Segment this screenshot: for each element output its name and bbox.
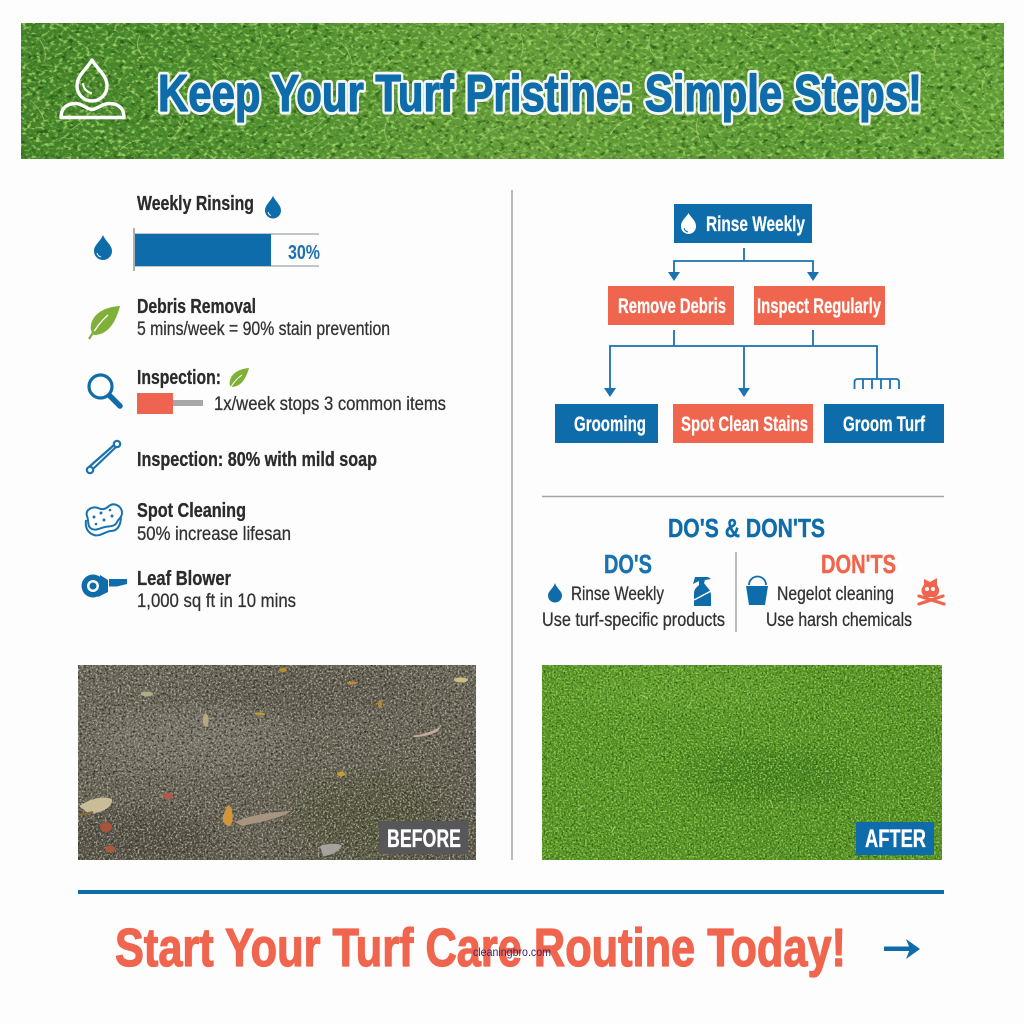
before photo xyxy=(78,665,476,860)
spot cleaning text xyxy=(137,500,291,545)
debris leaves xyxy=(79,668,468,856)
icon: magnifying glass xyxy=(89,375,120,406)
do's column: DO'S xyxy=(604,549,652,579)
box: inspect regularly: Inspect Regularly xyxy=(757,295,881,318)
don'ts column: DON'TS xyxy=(821,549,896,579)
icon: leaf blower xyxy=(82,574,127,598)
weekly rinsing item: Weekly Rinsing xyxy=(137,193,254,215)
box: inspect regularly xyxy=(754,286,885,325)
inspection item xyxy=(137,367,446,415)
box: spot clean stains xyxy=(673,404,813,443)
icon: water drop on surface xyxy=(61,60,124,118)
leaf blower text xyxy=(137,568,296,612)
before label xyxy=(379,821,468,854)
box: rinse weekly: Rinse Weekly xyxy=(706,213,805,236)
bar chart: 30 percent xyxy=(134,228,320,271)
do's column: Rinse Weekly xyxy=(571,583,664,605)
leaf blower text: 1,000 sq ft in 10 mins xyxy=(137,590,296,612)
call to action: Start Your Turf Care Routine Today! xyxy=(115,918,846,978)
header banner xyxy=(21,20,1004,159)
arrow xyxy=(884,939,920,959)
box: rinse weekly xyxy=(674,204,812,243)
inspection item: 1x/week stops 3 common items xyxy=(214,393,446,415)
do's column xyxy=(542,549,725,631)
don'ts column: Use harsh chemicals xyxy=(766,609,912,631)
box: groom turf: Groom Turf xyxy=(843,413,926,436)
do's and don'ts heading: DO'S & DON'TS xyxy=(668,513,825,543)
box: groom turf xyxy=(824,404,944,443)
after photo xyxy=(542,665,942,860)
bar chart: 30 percent: 30% xyxy=(288,242,320,264)
icon: leaf xyxy=(89,306,120,339)
don'ts column: Negelot cleaning xyxy=(777,583,894,605)
panel: turf care stats xyxy=(82,193,446,612)
spot cleaning text: 50% increase lifesan xyxy=(137,523,291,545)
box: grooming xyxy=(555,404,658,443)
inspection item: Inspection: xyxy=(137,367,221,389)
mild soap text: Inspection: 80% with mild soap xyxy=(137,449,377,471)
banner grass photo xyxy=(21,20,1004,159)
icon: wrench tool xyxy=(87,441,120,473)
after label: AFTER xyxy=(865,825,926,853)
box: remove debris: Remove Debris xyxy=(618,295,726,318)
panel: do's and don'ts xyxy=(542,513,944,632)
debris removal text: 5 mins/week = 90% stain prevention xyxy=(137,318,390,340)
box: grooming: Grooming xyxy=(574,413,646,436)
debris removal text xyxy=(137,296,390,340)
watermark: cleaningbro.com xyxy=(473,945,551,959)
spot cleaning text: Spot Cleaning xyxy=(137,500,246,522)
flowchart connectors xyxy=(604,248,899,397)
debris removal text: Debris Removal xyxy=(137,296,256,318)
panel: flowchart xyxy=(555,204,944,443)
leaf blower text: Leaf Blower xyxy=(137,568,231,590)
after label xyxy=(856,822,934,855)
before label: BEFORE xyxy=(387,825,461,853)
box: spot clean stains: Spot Clean Stains xyxy=(681,413,808,436)
do's column: Use turf-specific products xyxy=(542,609,725,631)
icon: sponge xyxy=(86,504,122,535)
icon: water drop xyxy=(94,235,112,260)
box: remove debris xyxy=(608,286,734,325)
don'ts column xyxy=(746,549,944,631)
